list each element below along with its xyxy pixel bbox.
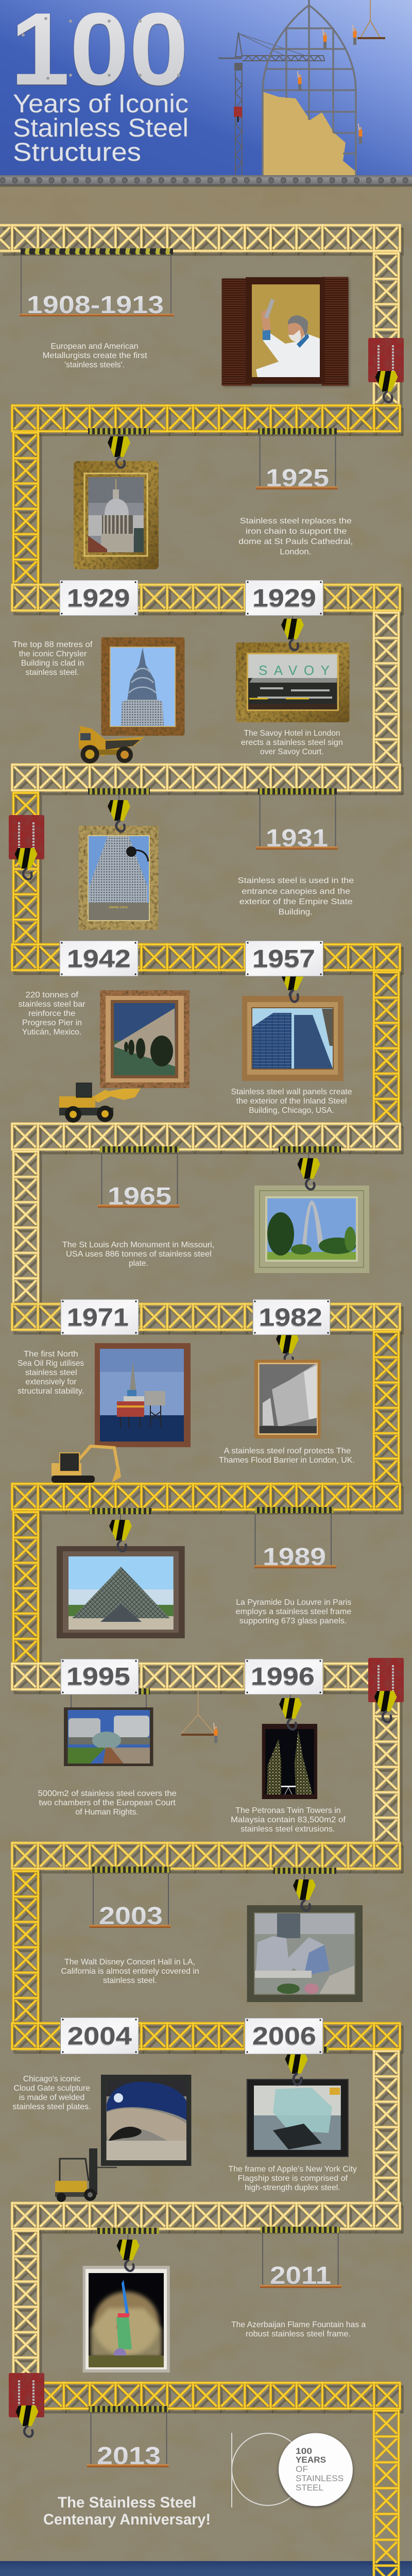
hook [107,800,132,832]
year plate [60,580,138,616]
description [231,1088,352,1115]
description: The Walt Disney Concert Hall in LA, [64,1958,195,1967]
truss column right 5 [374,1690,401,1845]
description: high-strength duplex steel. [245,2183,340,2192]
event 1996 [231,1658,404,1834]
year plate: 1957 [252,945,315,973]
description [62,1241,214,1268]
truss column left 5 [13,1870,41,2026]
event 1929 Savoy [236,580,349,756]
picture: Progreso Pier [100,990,190,1088]
description: Flagship store is comprised of [238,2174,348,2183]
description: Malaysia contain 83,500m2 of [231,1816,346,1824]
hook tip over frame [294,2074,301,2084]
dump truck [79,726,144,764]
picture: Gateway Arch [254,1185,369,1273]
description: Thames Flood Barrier in London, UK. [219,1456,355,1465]
picture: Savoy Hotel [236,642,349,722]
year plate [61,1659,139,1694]
year plate: 2006 [252,2023,316,2050]
description: stainless steel bar [19,1000,85,1009]
description: reinforce the [28,1009,75,1018]
event 1957 [231,941,352,1115]
picture: Chrysler Building [101,637,184,736]
hazard bar with cable [279,1146,341,1158]
description: supporting 673 glass panels. [239,1617,347,1625]
100 years logo: STEEL [296,2483,323,2493]
description: Yuticán, Mexico. [22,1028,81,1037]
truss 6 [12,1123,403,1154]
description: The first North [24,1350,78,1359]
year plate: 2004 [67,2023,132,2050]
description: stainless steel [25,1368,77,1377]
description: exterior of the Empire State [239,897,353,906]
truss 2 [12,404,403,436]
description [231,2320,366,2338]
hanging year sign 1925 [256,428,338,492]
description: The Petronas Twin Towers in [235,1806,341,1815]
event 1971 [18,1299,191,1483]
picture: Cloud Gate [101,2075,191,2166]
hook [108,1520,134,1551]
year plate: 1929 [67,585,130,612]
hanging year sign 1989 [254,1507,336,1571]
centenary heading: The Stainless Steel [58,2494,196,2511]
description: The Savoy Hotel in London [244,729,340,738]
year plate [61,1299,139,1335]
event 1995 [38,1659,217,1817]
year plate: 1995 [66,1663,130,1690]
description: over Savoy Court. [260,748,323,756]
hanging year sign 1908-1913 [20,248,174,319]
description [236,1598,351,1625]
hook tip over frame [290,990,298,1002]
description: The Azerbaijan Flame Fountain has a [231,2320,366,2329]
title [13,89,188,166]
sling with worker [181,1690,217,1743]
truss 9 [12,1663,403,1694]
hanging year sign 2011 [260,2227,341,2290]
hook [292,1879,318,1911]
centenary heading: Centenary Anniversary! [43,2511,211,2528]
description: extensively for [26,1378,77,1386]
picture: North Sea oil rig [95,1343,191,1447]
truss column final with base [362,2410,402,2576]
description: is made of welded [19,2093,84,2102]
year plate [61,2018,139,2054]
picture: Savoy Hotel: SAVOY [259,663,330,678]
hanging year sign 1908-1913: 1908-1913 [27,292,164,319]
hanging year sign 2011: 2011 [270,2262,331,2290]
workers on building [298,25,363,144]
event 1931 [9,788,354,930]
year plate: 1996 [251,1663,315,1690]
centenary heading [43,2494,211,2528]
hook [275,1333,301,1364]
truss 12 [12,2202,403,2233]
picture: St Pauls Cathedral [74,461,159,569]
description: Building. [279,908,313,917]
tower crane [218,32,324,175]
truss column right 4 [374,1331,401,1486]
hanging year sign 2013: 2013 [97,2443,161,2470]
building frame under construction [263,0,356,175]
picture: European Court of Human Rights [64,1707,153,1766]
year plate: 1982 [259,1304,322,1331]
100 years logo: YEARS [296,2455,326,2465]
description: 'stainless steels'. [64,361,125,369]
description [18,1350,84,1396]
100 years logo: OF [296,2464,308,2474]
description: erects a stainless steel sign [241,738,343,747]
title: Stainless Steel [13,113,188,142]
blue floor panel [0,2561,412,2576]
description: La Pyramide Du Louvre in Paris [236,1598,351,1607]
truss column left 3 [13,1150,41,1306]
truss column right 6 [374,2050,401,2206]
truss 5 [12,943,403,975]
truss column left 6 [13,2230,41,2385]
hanging year sign 1989: 1989 [263,1544,326,1571]
year plate: 1971 [67,1304,129,1331]
hook [297,1158,322,1190]
hanging year sign 2013 [87,2406,169,2470]
hanging year sign 1925: 1925 [266,465,329,492]
picture: Louvre Pyramid [57,1546,185,1638]
description: The top 88 metres of [12,640,93,649]
header sky panel [0,0,412,176]
description [12,640,93,677]
event 1925 [74,428,353,569]
red counterweight block with hook [9,815,44,879]
red counterweight block with hook [368,338,404,402]
hook [280,970,306,1001]
title: Years of Iconic [13,89,188,118]
year plate [245,941,323,976]
year plate [245,580,323,616]
truss column left 1 [13,432,41,587]
description: Chicago's iconic [23,2075,81,2083]
description: Cloud Gate sculpture [13,2084,90,2093]
truss column right 3 [374,971,401,1127]
truss column right 2 [374,612,401,767]
hook [115,2240,141,2271]
description [228,2165,357,2192]
hanging beam on sling [357,0,385,39]
description: robust stainless steel frame. [246,2330,351,2338]
description: Stainless steel wall panels create [231,1088,352,1096]
description: Stainless steel replaces the [240,517,352,526]
excavator [52,1446,120,1483]
hanging year sign 1931 [256,788,338,852]
hook [278,1694,304,1730]
truss 11 [12,2022,403,2054]
loader [59,1083,141,1123]
event 1908-1913 [20,248,404,402]
description [19,991,85,1037]
title: Structures [13,138,141,166]
truss column left 2 [13,792,41,947]
hook [284,2053,310,2084]
description: 5000m2 of stainless steel covers the [38,1789,177,1798]
steel riveted bar [0,175,412,187]
description: stainless steel extrusions. [241,1825,335,1834]
forklift [55,2148,117,2202]
window picture: metallurgist [222,277,350,387]
event 1929 Chrysler [12,580,184,764]
description: Sea Oil Rig utilises [18,1359,84,1368]
event 1942 [19,941,190,1123]
event 1989 [57,1507,351,1638]
truss column right 1 [374,252,401,408]
description: the iconic Chrysler [19,650,87,658]
description: Metallurgists create the first [43,351,147,360]
hazard bar with cable [90,1508,152,1520]
description: Building, Chicago, USA. [249,1106,334,1115]
100 years logo: 100 [296,2446,312,2456]
hanging year sign 1965 [98,1146,179,1210]
hanging year sign 1965: 1965 [108,1183,171,1210]
hanging year sign 2003 [90,1867,171,1930]
year plate [60,941,138,976]
description: 220 tonnes of [26,991,79,999]
description [12,2075,91,2111]
truss 4 [12,764,403,795]
hazard bar with cable [88,428,150,437]
picture: Empire State Building [79,826,159,930]
truss 10 [12,1842,403,1873]
100 years logo: STAINLESS [296,2473,344,2483]
truss 7 [12,1303,403,1334]
description [231,1806,346,1834]
description [38,1789,177,1817]
description: Stainless steel is used in the [238,876,354,885]
hazard bar with cable [88,788,150,800]
event 2006 [228,2018,357,2192]
year plate: 1929 [252,585,316,612]
hazard stub and hanging cables [71,1688,150,1707]
description: California is almost entirely covered in [61,1967,199,1976]
100 years logo [232,2433,353,2507]
description [43,342,147,369]
year plate: 1942 [67,945,131,973]
event 2004 [12,2018,191,2202]
description: Building is clad in [21,659,84,668]
description: London. [280,548,311,556]
picture: Empire State Building: EMPIRE STATE [109,906,128,909]
description: the exterior of the Inland Steel [236,1097,347,1106]
truss 3 [12,584,403,615]
description: dome at St Pauls Cathedral, [238,537,353,546]
event 2003 [61,1867,363,2002]
description: employs a stainless steel frame [236,1607,351,1616]
description [241,729,343,756]
truss 13 [12,2382,403,2413]
hazard bar with cable [97,2228,159,2240]
picture: Apple store New York [247,2079,348,2157]
description: A stainless steel roof protects The [224,1447,351,1455]
description: stainless steel. [26,668,79,677]
description: The frame of Apple's New York City [228,2165,357,2174]
description [238,876,354,917]
description: European and American [50,342,138,351]
picture: Petronas Twin Towers [262,1724,317,1799]
hazard bar with cable [273,1868,336,1879]
description [219,1447,355,1465]
picture: Azerbaijan Flame Fountain [83,2266,170,2372]
hook [107,436,132,468]
red counterweight block with hook [368,1658,404,1722]
description: entrance canopies and the [242,887,350,896]
description: two chambers of the European Court [39,1799,176,1807]
description: USA uses 886 tonnes of stainless steel [66,1250,212,1259]
event 1982 [219,1299,355,1465]
hanging year sign 1931: 1931 [266,825,328,852]
description: iron chain to support the [246,527,347,536]
picture: Thames Barrier [254,1360,320,1438]
year plate [253,1299,330,1335]
description: stainless steel plates. [12,2103,91,2111]
picture: Inland Steel Building [242,996,344,1081]
hazard stub [323,2046,329,2053]
description: stainless steel. [103,1976,157,1985]
event 2013 [43,2406,353,2528]
picture: Walt Disney Concert Hall [247,1905,363,2002]
event 1965 [62,1146,369,1273]
hanging year sign 2003: 2003 [99,1903,163,1930]
description [238,517,353,556]
description: plate. [129,1259,148,1268]
description: structural stability. [18,1387,84,1396]
truss column left 4 [13,1511,41,1667]
hook [280,616,306,650]
description: of Human Rights. [75,1808,139,1817]
truss 1 [0,224,403,256]
year plate [245,2018,323,2054]
description: The St Louis Arch Monument in Missouri, [62,1241,214,1249]
truss 8 [12,1483,403,1514]
event 2011 [9,2227,366,2437]
description: Progreso Pier in [22,1019,82,1027]
red counterweight block with hook [9,2373,44,2437]
description [61,1958,199,1985]
year plate [245,1659,323,1694]
